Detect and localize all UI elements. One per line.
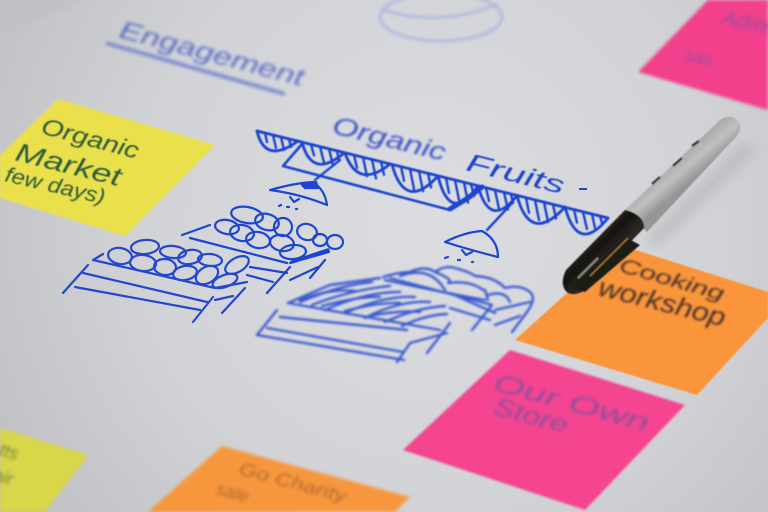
sticky note: orange bottom: sale xyxy=(214,479,251,506)
sketch: hanging lamp right xyxy=(445,231,498,262)
note text: Cooking workshop: workshop xyxy=(596,272,729,332)
note text: Organic Market few days: Market xyxy=(13,137,127,193)
sticky note: orange bottom: Go Charity xyxy=(237,459,350,507)
sticky note: orange Cooking workshop xyxy=(515,245,768,395)
sketch: Organic Fruits title: Organic xyxy=(330,112,450,167)
sticky note: yellow bottom left xyxy=(0,428,88,512)
note text: Cooking workshop xyxy=(596,255,729,332)
sketch: fruit stall back left xyxy=(182,204,343,293)
note text: Organic Market few days xyxy=(3,113,143,209)
sticky note: pink Our Own Store xyxy=(403,350,685,510)
pen cap xyxy=(563,210,644,294)
sticky note: orange bottom xyxy=(148,446,410,512)
pen shadow xyxy=(648,142,756,248)
faint circle sketch at top xyxy=(380,0,502,41)
sketch: Organic Fruits title xyxy=(330,112,587,200)
note text: Organic Market few days: Organic xyxy=(39,113,143,164)
sketch: market awning xyxy=(257,131,608,234)
sticky note: yellow Organic Market xyxy=(0,99,215,236)
marker pen xyxy=(563,117,756,294)
note text: Organic Market few days: few days) xyxy=(3,163,107,209)
sticky note: pink top right: sas xyxy=(683,44,715,70)
heading: Engagement: Engagement xyxy=(116,16,309,92)
heading: Engagement xyxy=(106,16,309,94)
sticky note: pink Our Own Store: Our Own xyxy=(490,369,652,437)
sketch: fruit stall front left xyxy=(63,239,252,322)
sketch: fruit stall back right xyxy=(383,267,533,332)
paper corner fold xyxy=(0,0,88,34)
note text: Cooking workshop: Cooking xyxy=(617,255,727,306)
sketch: Organic Fruits title: Fruits xyxy=(464,149,567,200)
pen body xyxy=(625,117,740,232)
sticky note: pink top right xyxy=(638,0,768,110)
sticky note: pink Our Own Store: Store xyxy=(490,393,571,439)
sketch: hanging lamp left xyxy=(270,182,327,209)
sketch: fruit stall front right xyxy=(257,278,450,362)
